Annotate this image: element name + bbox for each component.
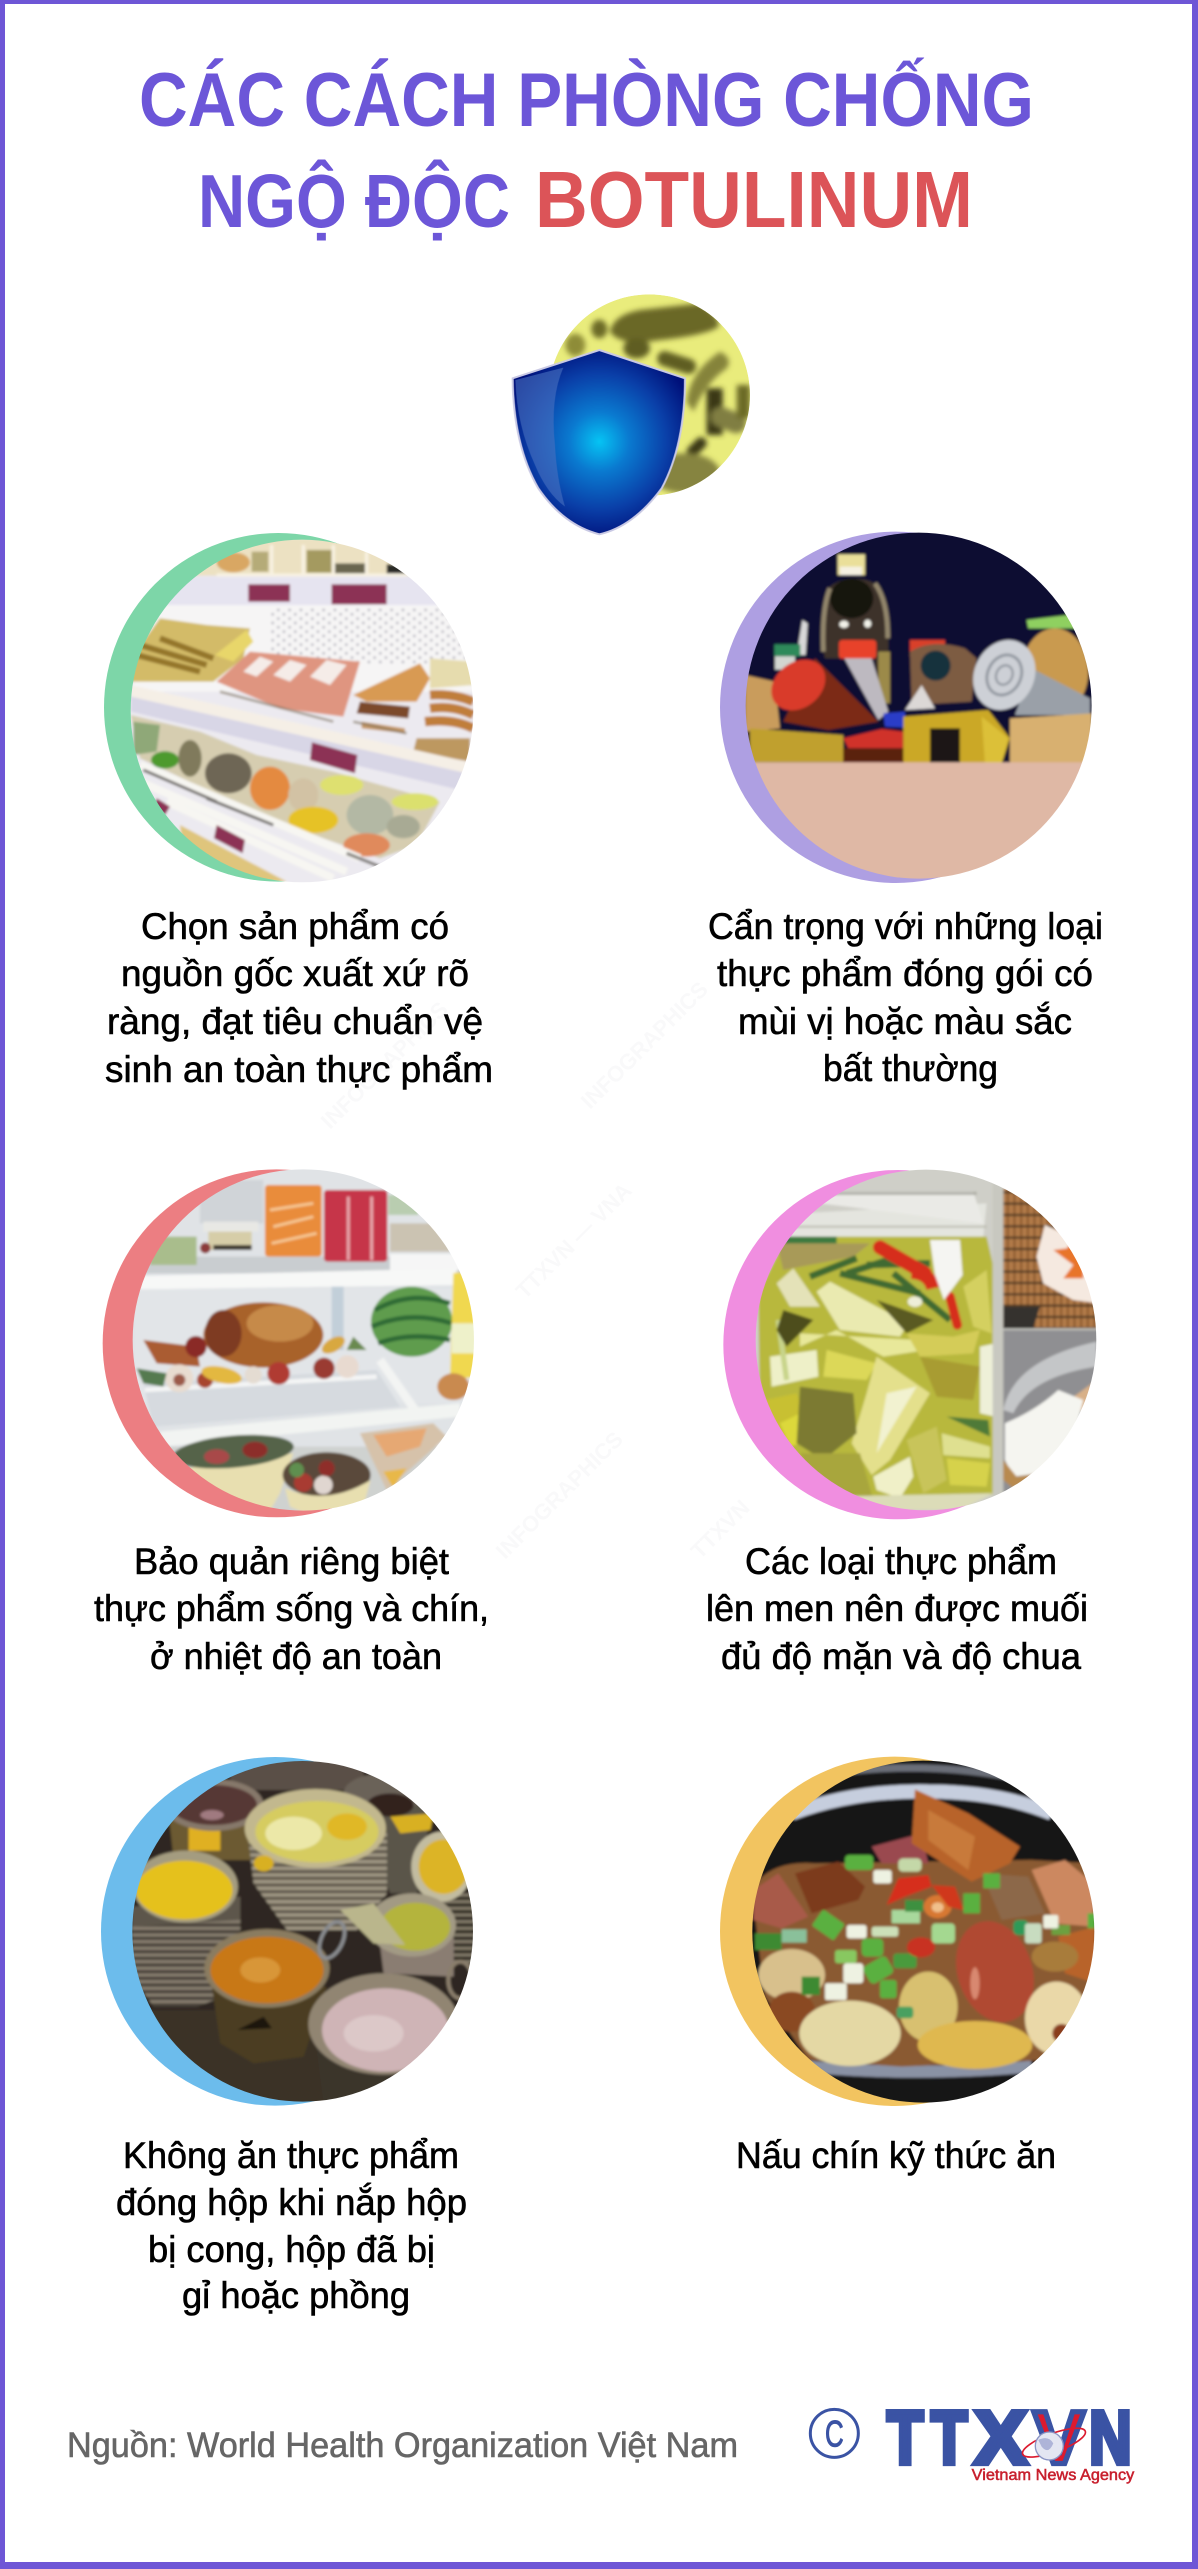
photo: cooked dish in pot	[720, 1750, 1102, 2110]
panel: choose products	[104, 533, 493, 1090]
text: fermented food: lên men nên được muối	[706, 1588, 1088, 1629]
text: choose products: sinh an toàn thực phẩm	[105, 1049, 493, 1090]
photo: supermarket shelf	[104, 533, 487, 888]
text: choose products: Chọn sản phẩm có	[141, 906, 449, 947]
watermarks: INFOGRAPHICS	[316, 997, 453, 1134]
logo: TTXVN Vietnam News Agency	[887, 2395, 1135, 2484]
logo: TTXVN Vietnam News Agency: T	[931, 2395, 967, 2479]
text: packaged food caution: mùi vị hoặc màu sắc	[738, 1001, 1072, 1042]
photo: refrigerator	[103, 1160, 487, 1520]
text: fermented food	[706, 1541, 1088, 1677]
watermarks	[316, 977, 755, 1564]
copyright mark: C	[825, 2413, 844, 2455]
watermarks: TTXVN — VNA	[511, 1178, 637, 1304]
photo: open cans	[101, 1750, 484, 2110]
text: canned food: bị cong, hộp đã bị	[148, 2229, 435, 2270]
text: separate storage: thực phẩm sống và chín,	[94, 1588, 489, 1629]
text: canned food: Không ăn thực phẩm	[123, 2135, 459, 2176]
text: packaged food caution: thực phẩm đóng gói có	[717, 953, 1093, 994]
text: packaged food caution	[708, 906, 1103, 1089]
panel: cook thoroughly	[720, 1750, 1102, 2176]
logo: TTXVN Vietnam News Agency: N	[1089, 2395, 1132, 2479]
text: choose products: nguồn gốc xuất xứ rõ	[121, 953, 469, 994]
title: NGỘ ĐỘC	[198, 159, 510, 243]
text: fermented food: đủ độ mặn và độ chua	[721, 1636, 1081, 1677]
logo: TTXVN Vietnam News Agency: X	[974, 2395, 1027, 2479]
title: CÁC CÁCH PHÒNG CHỐNG	[139, 58, 1034, 143]
text: cook thoroughly: Nấu chín kỹ thức ăn	[736, 2135, 1056, 2176]
text: packaged food caution: bất thường	[823, 1048, 998, 1089]
text: separate storage: Bảo quản riêng biệt	[134, 1541, 450, 1582]
text: separate storage	[94, 1541, 489, 1677]
copyright mark	[810, 2409, 858, 2457]
text: canned food: đóng hộp khi nắp hộp	[116, 2182, 467, 2223]
photo: packaged food box	[720, 525, 1102, 890]
panel: packaged food caution	[708, 525, 1103, 1089]
source note: Nguồn: World Health Organization Việt Nam	[67, 2426, 738, 2465]
text: choose products: ràng, đạt tiêu chuẩn vệ	[107, 1001, 483, 1042]
text: separate storage: ở nhiệt độ an toàn	[150, 1636, 442, 1677]
logo: TTXVN Vietnam News Agency: T	[887, 2395, 923, 2479]
icon: shield over bacteria	[513, 294, 750, 534]
text: fermented food: Các loại thực phẩm	[745, 1541, 1057, 1582]
panel: separate storage	[94, 1160, 489, 1677]
panel: canned food	[101, 1750, 484, 2316]
photo: pickled vegetable jar	[723, 1160, 1107, 1520]
title	[139, 58, 1034, 244]
text: choose products	[105, 906, 493, 1090]
watermarks: INFOGRAPHICS	[491, 1427, 628, 1564]
text: canned food: gỉ hoặc phồng	[182, 2275, 410, 2316]
logo: TTXVN Vietnam News Agency: V	[1033, 2395, 1085, 2479]
panel: fermented food	[706, 1160, 1107, 1677]
text: packaged food caution: Cẩn trọng với những loại	[708, 906, 1103, 947]
logo: TTXVN Vietnam News Agency: Vietnam News Agency	[972, 2467, 1135, 2484]
text: canned food	[116, 2135, 467, 2316]
watermarks: INFOGRAPHICS	[576, 977, 713, 1114]
title: BOTULINUM	[535, 155, 973, 244]
watermarks: TTXVN	[686, 1495, 755, 1564]
